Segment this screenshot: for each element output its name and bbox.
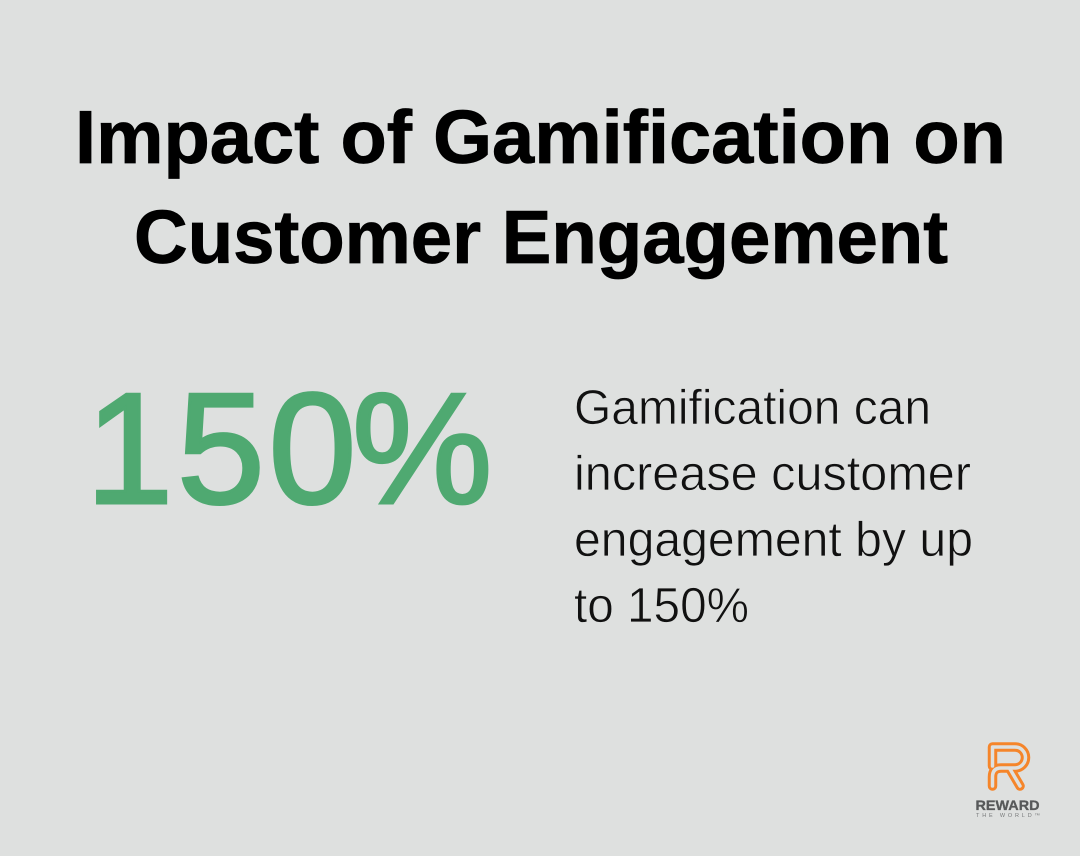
wordmark: REWARD: REWARD <box>976 797 1040 813</box>
description text <box>574 381 973 633</box>
description text: to 150% <box>574 579 749 633</box>
description text: engagement by up <box>574 513 973 567</box>
description text: Gamification can <box>574 381 931 435</box>
icon: orange R mark <box>992 747 1026 786</box>
description text: increase customer <box>574 447 971 501</box>
wordmark: THE WORLD: THE WORLD™ <box>976 813 1040 819</box>
title: Impact of Gamification on <box>75 95 1006 179</box>
big stat: 150%: 150% <box>86 361 492 537</box>
logo: Reward the World <box>976 747 1040 819</box>
title: Customer Engagement <box>134 195 948 279</box>
title <box>75 95 1006 279</box>
